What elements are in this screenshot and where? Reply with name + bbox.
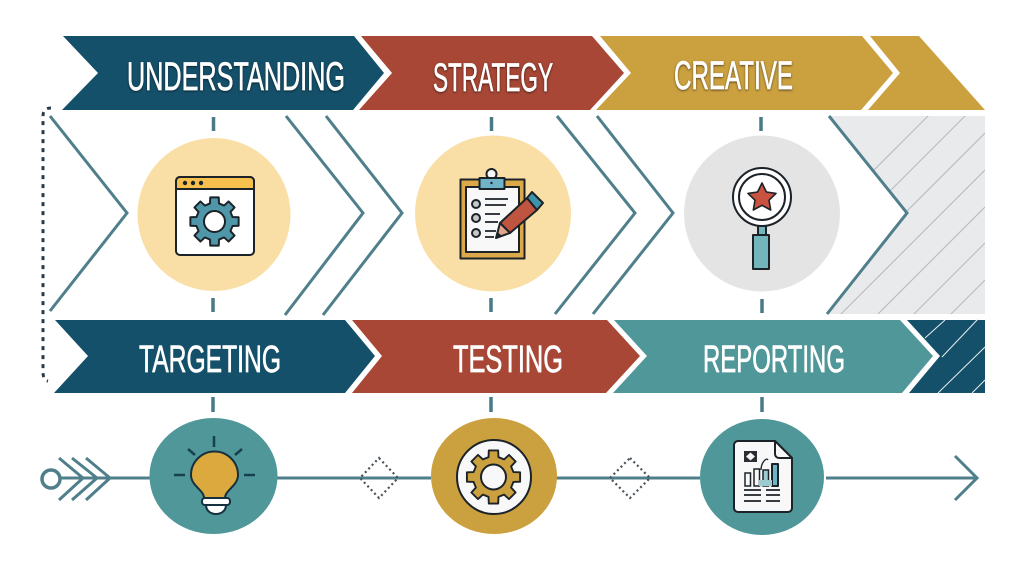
icon: settings window (138, 138, 290, 291)
icon: report document (700, 419, 824, 535)
icon: clipboard with pencil (415, 136, 571, 292)
bottom timeline line (60, 476, 976, 480)
end arrow head (955, 456, 977, 500)
banner: testing: TESTING (453, 339, 563, 381)
dotted left connector (43, 108, 51, 381)
top banner row (62, 36, 985, 110)
start node with feathered chevrons (42, 458, 110, 500)
connector ticks (213, 117, 762, 412)
banner: creative: CREATIVE (674, 54, 793, 98)
dotted diamond left (360, 458, 398, 498)
banner: understanding (62, 36, 384, 110)
process infographic (40, 36, 986, 535)
icon: magnifier with star (684, 136, 840, 292)
banner: strategy: STRATEGY (433, 56, 553, 100)
banner: targeting: TARGETING (139, 339, 281, 381)
banner: understanding: UNDERSTANDING (127, 55, 345, 99)
banner: reporting: REPORTING (703, 339, 845, 381)
dotted diamond right (610, 458, 650, 498)
banner: gold end piece (868, 36, 985, 110)
icon: light bulb (150, 418, 278, 534)
banner: reporting (613, 320, 933, 393)
banner: dark hatched end piece (907, 319, 985, 393)
lower banner row (54, 319, 985, 393)
hatched gray end panel (829, 116, 985, 314)
banner: creative (596, 36, 893, 110)
icon: gear badge (431, 418, 557, 534)
banner: testing (352, 320, 640, 393)
banner: targeting (54, 320, 375, 393)
banner: strategy (359, 36, 624, 110)
middle row chevron lines (50, 116, 907, 315)
